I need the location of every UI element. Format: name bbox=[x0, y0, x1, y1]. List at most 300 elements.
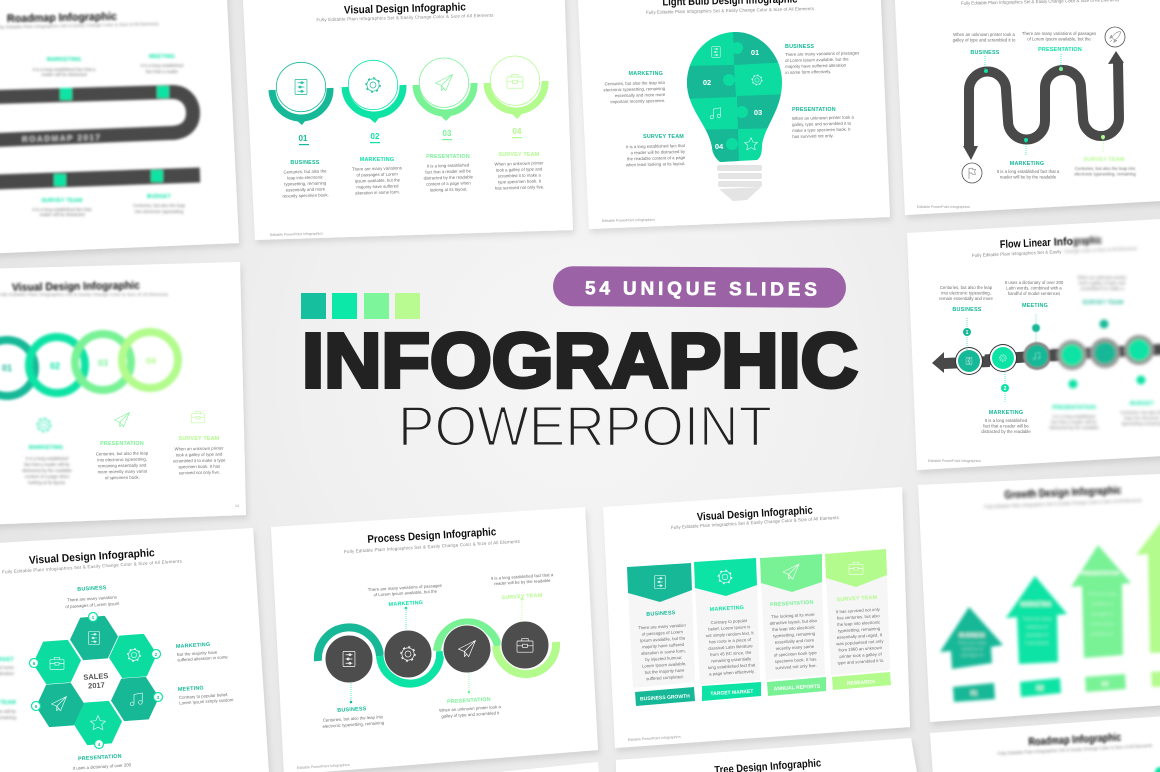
badge numbers: 5 bbox=[35, 704, 38, 709]
number badges bbox=[30, 612, 162, 748]
arrow body text: variations of bbox=[1091, 601, 1114, 606]
column 4 text: type specimen book. It bbox=[498, 178, 542, 185]
flow left sharp: MEETING bbox=[1022, 303, 1048, 309]
label business: When an unknown printer took a bbox=[953, 32, 1016, 37]
slide: roadmap top left bbox=[0, 0, 239, 254]
connector dots bbox=[350, 598, 523, 703]
bulb: 03 bbox=[754, 108, 762, 117]
title: Visual Design Infographic bbox=[697, 505, 813, 523]
flow left sharp: Editable PowerPoint Infographics bbox=[928, 459, 981, 463]
card 2 text: belief, Lorem Ipsum is bbox=[708, 624, 750, 632]
card 4 text bbox=[834, 595, 886, 666]
label meeting: Lorem Ipsum simply random bbox=[179, 697, 234, 705]
column 1 text: leap into electronic bbox=[287, 175, 324, 180]
tag numbers: 02 bbox=[1037, 686, 1044, 692]
label business bbox=[953, 32, 1016, 56]
column 1 text: essentially and more bbox=[286, 186, 326, 193]
column 2 text: majority have suffered bbox=[356, 183, 399, 190]
arrow body text: Lorem Ipsum bbox=[1090, 621, 1114, 626]
badge numbers: 4 bbox=[98, 742, 101, 747]
label business: There are many variations of passages bbox=[785, 50, 859, 57]
circle 4 bbox=[487, 56, 545, 119]
headline: INFOGRAPHIC bbox=[302, 318, 858, 404]
subtitle: Fully Editable Plain Infographics Set & Easily Change Color & Size of All Elements bbox=[997, 743, 1153, 756]
card buttons bbox=[635, 672, 891, 706]
column 4 text: 04 bbox=[513, 127, 522, 136]
arrow 2 bbox=[1006, 576, 1067, 664]
flow left sharp: into electronic typesetting, bbox=[941, 290, 991, 296]
roadmap content blurred: SURVEY TEAM bbox=[42, 198, 83, 204]
flow left sharp: BUSINESS bbox=[952, 307, 982, 313]
card 3 text: of specimen book type bbox=[774, 650, 817, 658]
arrow body text: passages of bbox=[1026, 632, 1049, 637]
label meeting: MEETING bbox=[178, 685, 204, 693]
hexagon icons bbox=[50, 631, 142, 730]
label presentation: PRESENTATION bbox=[447, 697, 491, 705]
slide: roadmap bottom right bbox=[930, 715, 1160, 772]
card 1 text: There are many variation bbox=[638, 623, 687, 630]
label marketing: of Lorem Ipsum available, but the bbox=[373, 589, 438, 597]
label marketing: electronic typesetting, remaining bbox=[603, 86, 666, 92]
rings right text: PRESENTATION bbox=[100, 441, 144, 447]
flow left sharp: MARKETING bbox=[989, 410, 1023, 416]
rings right text bbox=[96, 412, 239, 508]
flow right blurred: SURVEY TEAM bbox=[1083, 300, 1124, 306]
arrow 4 bbox=[1136, 513, 1160, 653]
bottom tags bbox=[953, 671, 1160, 702]
label meeting bbox=[178, 685, 234, 705]
roadmap content blurred: MARKETING bbox=[47, 57, 81, 63]
column 2 text bbox=[352, 132, 403, 196]
rings blurred part: distracted by the readable bbox=[22, 468, 72, 473]
footer: Editable PowerPoint Infographics bbox=[270, 232, 323, 237]
flow right blurred: distracted by the readable bbox=[1049, 425, 1099, 430]
label business bbox=[322, 706, 385, 729]
label marketing: important recently specimen. bbox=[610, 98, 665, 104]
roadmap content blurred: reader will be distracted bbox=[39, 212, 85, 217]
card 1 text: majority have suffered bbox=[642, 642, 685, 649]
card 3 text: the leap into electronic bbox=[772, 624, 816, 632]
slide: flow linear bbox=[907, 218, 1160, 470]
slide: hexagon sales bbox=[0, 528, 270, 772]
label business bbox=[785, 44, 860, 75]
card 1 text: Ipsum available, but the bbox=[640, 635, 686, 643]
slide: light bulb bbox=[577, 0, 890, 229]
button labels: RESEARCH bbox=[847, 679, 876, 687]
label presentation: PRESENTATION bbox=[792, 107, 836, 113]
card 4 text: It has survived not only bbox=[836, 607, 881, 614]
arrow body text: passages of bbox=[961, 652, 984, 657]
flow right blurred: leap into electronic bbox=[1124, 416, 1160, 420]
label marketing bbox=[603, 71, 666, 104]
arrow labels: BUSINESS bbox=[959, 633, 985, 639]
subtitle: Fully Editable Plain Infographics Set & Easily Change Color & Size of All Elements bbox=[344, 539, 521, 554]
flow right blurred: BUDGET bbox=[1130, 401, 1154, 407]
column 1 text: BUSINESS bbox=[290, 160, 320, 166]
label business: There are many variations bbox=[67, 594, 117, 603]
rings blurred part: Visual Design Infographic bbox=[12, 280, 140, 294]
teal marker bbox=[1155, 767, 1160, 772]
label survey team: Centuries, but also the leap into bbox=[1075, 166, 1136, 171]
flow right blurred: scrambled it to make a bbox=[1080, 286, 1124, 291]
circle 1 bbox=[272, 62, 330, 125]
label survey team: the readable content of a page bbox=[627, 155, 686, 161]
dark circles bbox=[325, 621, 549, 683]
flow left sharp: handful of model sentences bbox=[1008, 291, 1060, 296]
label business: BUSINESS bbox=[77, 585, 107, 593]
rings right text: Centuries, but also the leap bbox=[96, 451, 149, 456]
rings right text: 14 bbox=[235, 504, 239, 508]
label marketing: There are many variations of passages bbox=[368, 583, 442, 592]
label marketing: Centuries, but also the leap into bbox=[604, 80, 666, 86]
label marketing bbox=[176, 642, 228, 662]
subheadline: POWERPOINT bbox=[398, 394, 772, 458]
roadmap content blurred: It is a long established fact that bbox=[32, 207, 92, 212]
rings blurred part: 04 bbox=[146, 356, 156, 366]
flow right blurred: Change Color & Size of All Elements bbox=[1064, 246, 1138, 254]
slide: tree design bbox=[616, 738, 920, 772]
left labels blurred bbox=[0, 657, 17, 720]
process icons bbox=[343, 639, 533, 667]
rings blurred part: fact that a reader will be bbox=[24, 462, 70, 467]
card 3 text: The looking at its more bbox=[771, 612, 815, 619]
badge numbers: 6 bbox=[33, 661, 36, 666]
label survey team: SURVEY TEAM bbox=[1084, 157, 1125, 163]
label business: of Lorem Ipsum available, but the bbox=[785, 57, 849, 63]
subtitle: Fully Editable Plain Infographics Set & Easily Change Color & Size of All Elements bbox=[671, 515, 840, 530]
label marketing: It is a long established fact that a bbox=[997, 169, 1060, 174]
card 2 text: long established fact that bbox=[708, 662, 756, 670]
card 3 text: attractive layout, but also bbox=[769, 618, 818, 626]
label business: BUSINESS bbox=[337, 706, 367, 714]
flow left sharp: fact that a reader will be bbox=[983, 424, 1029, 428]
flow left sharp: 2 bbox=[1004, 386, 1007, 392]
roadmap content blurred: It is a long established bbox=[141, 63, 184, 68]
column 4 text bbox=[494, 127, 545, 191]
card 4 text: the leap into electronic bbox=[837, 619, 881, 627]
card 4 text: typesetting, remaining bbox=[838, 626, 881, 633]
label presentation: galley, type and scrambled it to bbox=[792, 121, 852, 127]
column 2 text: Ipsum available, but the bbox=[355, 177, 401, 184]
flow right blurred: fact that a reader will be bbox=[1051, 420, 1097, 424]
flow right blurred: took a galley of type and bbox=[1079, 280, 1126, 286]
column 1 text: Centuries, but also the bbox=[283, 168, 327, 175]
badge: 54 unique slides bbox=[553, 266, 846, 308]
card 2 text: a page when effectively. bbox=[709, 669, 755, 676]
road bbox=[969, 62, 1119, 147]
label business: BUSINESS bbox=[970, 50, 1000, 56]
column 2 text: MARKETING bbox=[360, 157, 394, 163]
rings right text: When an unknown printer bbox=[174, 446, 224, 451]
label business: electronic typesetting, remaining bbox=[322, 720, 385, 729]
title: Growth Design Infographic bbox=[1004, 485, 1122, 501]
badge: 54 unique slides: 54 UNIQUE SLIDES bbox=[585, 278, 817, 301]
footer: Editable PowerPoint Infographics bbox=[917, 205, 970, 209]
slide: process design bbox=[271, 507, 598, 772]
button labels bbox=[640, 679, 876, 702]
column 2 text: 02 bbox=[371, 132, 380, 141]
column 4 text: scrambled it to make a bbox=[498, 172, 542, 179]
card 1 text: but the majority have bbox=[645, 668, 685, 675]
column 1 text: 01 bbox=[299, 134, 308, 143]
flow left sharp: Flow Linear bbox=[1000, 237, 1052, 251]
rings right text: survived not only five. bbox=[179, 470, 220, 475]
label survey team: SURVEY TEAM bbox=[643, 134, 684, 140]
arrow heads bbox=[963, 51, 1124, 160]
column 2 text: alteration in some form. bbox=[355, 189, 400, 196]
card 3 text: recently many same bbox=[775, 644, 815, 651]
column 2 text: of passages of Lorem bbox=[356, 171, 398, 178]
subtitle: Fully Editable Plain Infographics Set & Easily Change Color & Size of All Elements bbox=[646, 6, 815, 15]
column 1 text: typesetting, remaining bbox=[284, 180, 327, 187]
rings blurred part: It is a long established bbox=[26, 456, 69, 461]
flow right blurred: When an unknown printer bbox=[1078, 275, 1127, 280]
column 3 text bbox=[423, 129, 474, 193]
rings blurred part: 03 bbox=[98, 358, 108, 368]
flow middle blur: Info bbox=[1054, 236, 1073, 249]
flow left sharp: Latin words, combined with a bbox=[1006, 286, 1062, 290]
connectors bbox=[351, 599, 522, 702]
label presentation: When an unknown printer took a bbox=[439, 704, 502, 713]
center label: SALES bbox=[83, 671, 109, 682]
slide: growth design bbox=[918, 473, 1160, 722]
label business: of passages of Lorem Ipsum bbox=[65, 601, 120, 609]
roadmap content blurred: reader will be distracted bbox=[41, 72, 87, 77]
card 2 text: MARKETING bbox=[710, 605, 744, 613]
card 1 text: by injected humour. bbox=[645, 655, 683, 662]
rings blurred part: Fully Editable Plain Infographics Set & Easily Change Color & Size of All Elements bbox=[0, 292, 169, 297]
card 3 text: typesetting, remaining bbox=[773, 631, 816, 638]
card 4 text: printer took a galley of bbox=[839, 651, 883, 659]
card 1 text: BUSINESS bbox=[646, 610, 676, 618]
roadmap content blurred bbox=[0, 11, 200, 217]
arrow body text: There are many bbox=[1023, 616, 1051, 621]
bulb: 04 bbox=[715, 142, 724, 151]
label business: Centuries, but also the leap into bbox=[323, 714, 384, 723]
label marketing: MARKETING bbox=[1010, 161, 1044, 167]
column 4 text: has survived not only five. bbox=[495, 184, 544, 191]
label survey team: SURVEY TEAM bbox=[501, 593, 543, 601]
column 3 text: content of a page when bbox=[426, 180, 471, 187]
footer: Editable PowerPoint Infographics bbox=[602, 218, 655, 223]
label survey team: a reader will be distracted by bbox=[630, 149, 686, 155]
label presentation: has survived not only. bbox=[792, 133, 834, 139]
label business: in some form effectively. bbox=[785, 69, 831, 75]
label meeting: Contrary to popular belief, bbox=[179, 692, 228, 700]
label survey team bbox=[491, 572, 554, 601]
label presentation bbox=[73, 754, 132, 771]
card 2 text: has roots in a piece of bbox=[709, 637, 752, 644]
label business: BUSINESS bbox=[785, 44, 814, 50]
card 2 text bbox=[705, 605, 757, 677]
arrow body text: variations of bbox=[1026, 624, 1049, 629]
bulb: 02 bbox=[703, 78, 711, 87]
arrow labels bbox=[959, 571, 1120, 639]
flow left sharp: remain essentially and more bbox=[939, 296, 993, 301]
column 3 text: looking at its layout. bbox=[430, 186, 468, 192]
rings blurred part bbox=[0, 280, 178, 485]
subtitle: Fully Editable Plain Infographics Set & Easily Change Color & Size of All Elements bbox=[2, 558, 183, 574]
label survey team: It is a long established fact that a bbox=[491, 572, 554, 581]
arrow body text bbox=[958, 591, 1116, 657]
rings right text: more recently many variat bbox=[98, 469, 148, 474]
label survey team bbox=[625, 134, 686, 167]
column 4 text: took a galley of type and bbox=[496, 166, 543, 173]
footer: Editable PowerPoint Infographics bbox=[628, 735, 681, 742]
button labels: ANNUAL REPORTS bbox=[774, 684, 821, 692]
button labels: BUSINESS GROWTH bbox=[640, 694, 690, 702]
card 1 text: suffered completed. bbox=[646, 674, 684, 681]
subtitle: Fully Editable Plain Infographics Set & Easily Change Color & Size of All Elements bbox=[984, 498, 1143, 509]
label presentation bbox=[792, 107, 855, 139]
tag numbers bbox=[971, 682, 1109, 697]
column 4 text: When an unknown printer bbox=[494, 160, 544, 167]
label business: galley of type and scrambled it to bbox=[953, 38, 1016, 42]
bulb base bbox=[717, 165, 762, 201]
arrow body text: passages of bbox=[1091, 611, 1114, 616]
card 1 text: Lorem Ipsum available, bbox=[642, 661, 687, 669]
arrow body text: There are many bbox=[958, 640, 986, 645]
label presentation bbox=[1022, 31, 1096, 53]
label presentation: galley of type and scrambled it bbox=[441, 710, 500, 719]
flow right blurred: It is a long established bbox=[1053, 414, 1096, 419]
arrow body text: variations of bbox=[961, 646, 984, 651]
arrow body text: Lorem Ipsum bbox=[1025, 640, 1049, 645]
icon: rocket bbox=[1105, 27, 1125, 47]
label marketing bbox=[997, 161, 1060, 180]
colour squares bbox=[301, 293, 420, 319]
label survey team: when least looking at its layout. bbox=[626, 161, 685, 167]
card icons bbox=[655, 562, 863, 589]
slide: sliver under process bbox=[440, 762, 600, 772]
column 1 text: recently specimen book. bbox=[282, 192, 329, 199]
bulb bbox=[687, 32, 782, 162]
roadmap content blurred: BUDGET bbox=[147, 194, 171, 200]
label marketing bbox=[368, 583, 442, 608]
icon: flag bbox=[962, 163, 982, 183]
flow left sharp: Centuries, but also the leap bbox=[940, 285, 993, 290]
label marketing: MARKETING bbox=[176, 642, 211, 650]
flow right blurred: PRESENTATION bbox=[1052, 405, 1096, 411]
roadmap content blurred: ROADMAP 2017 bbox=[22, 133, 101, 144]
label marketing: essentially and more more bbox=[615, 92, 666, 98]
badge numbers bbox=[33, 615, 160, 747]
label presentation: of Lorem Ipsum available, but the bbox=[1027, 36, 1091, 42]
card 3 text: survived not only five. bbox=[775, 663, 817, 670]
card 1 text: alteration in some form, bbox=[641, 648, 686, 656]
label marketing: suffered alteration in some bbox=[177, 654, 228, 662]
label marketing: reader will be by the readable bbox=[1000, 174, 1057, 180]
roadmap content blurred: Roadmap Infographic bbox=[7, 11, 117, 25]
slide: visual design cards bbox=[603, 487, 910, 748]
hexagons bbox=[32, 616, 160, 745]
bulb: 01 bbox=[751, 48, 759, 57]
card 2 text: from 45 BC since, the bbox=[710, 650, 752, 657]
label presentation: PRESENTATION bbox=[78, 754, 122, 762]
label presentation bbox=[439, 697, 502, 719]
flow right blurred: graphic bbox=[1073, 235, 1102, 248]
rings right text: took a galley of type and bbox=[176, 452, 223, 457]
card 3 text: specimen book. It has bbox=[775, 656, 817, 664]
flow left sharp bbox=[928, 237, 1064, 463]
arrow body text: available but bbox=[1091, 631, 1114, 636]
flow left sharp: 1 bbox=[966, 330, 969, 336]
rings right text: remaining essentially and bbox=[98, 463, 147, 468]
roadmap content blurred: MEETING bbox=[149, 54, 175, 60]
wave ribbon bbox=[318, 622, 556, 684]
label survey team: It is a long established fact that bbox=[626, 143, 686, 149]
subtitle: Fully Editable Plain Infographics Set & Easily Change Color & Size of All Elements bbox=[316, 13, 494, 22]
label presentation: When an unknown printer took a bbox=[792, 115, 854, 121]
arrow 1 bbox=[940, 607, 1003, 669]
badge numbers: 3 bbox=[157, 695, 160, 700]
rings blurred part: 01 bbox=[2, 363, 12, 373]
title: Process Design Infographic bbox=[367, 526, 497, 546]
label presentation: PRESENTATION bbox=[1038, 47, 1082, 53]
label survey team: electronic typesetting, remaining bbox=[1074, 172, 1136, 176]
card 3 text: essentially and more bbox=[775, 637, 815, 645]
rings blurred part: MARKETING bbox=[29, 445, 63, 451]
flow left sharp: Fully Editable Plain Infographics Set & Easily bbox=[972, 249, 1062, 258]
label business bbox=[65, 585, 120, 609]
flow left sharp: It is a long established bbox=[985, 418, 1028, 423]
label presentation: make a type specimen book. It bbox=[792, 127, 851, 133]
label marketing: MARKETING bbox=[389, 600, 423, 608]
card 4 text: was popularised not only bbox=[836, 638, 884, 646]
roadmap content blurred: into electronic typesetting bbox=[135, 209, 184, 214]
card 4 text: five centuries, but also bbox=[837, 613, 880, 621]
roadmap content blurred: It is a long established fact that a bbox=[33, 67, 96, 72]
card 2 text: not simply random text. It bbox=[706, 630, 755, 638]
card 3 text: PRESENTATION bbox=[770, 600, 814, 608]
column 3 text: It is a long established bbox=[427, 162, 470, 169]
title: Roadmap Infographic bbox=[1028, 732, 1122, 748]
label survey team: reader will be by the readable bbox=[494, 578, 551, 586]
column 2 text: There are many variations bbox=[352, 165, 402, 172]
tag numbers: 03 bbox=[1102, 682, 1109, 688]
flow middle blur bbox=[1023, 236, 1073, 370]
column 3 text: distracted by the readable bbox=[423, 174, 474, 181]
arrow labels: MARKETING bbox=[1021, 602, 1051, 608]
title: Visual Design Infographic bbox=[29, 547, 155, 567]
rings right text: into electronic typesetting, bbox=[97, 457, 147, 462]
card 1 text bbox=[638, 610, 690, 682]
circle 3 bbox=[416, 58, 474, 121]
rings right text: scrambled it to make a type bbox=[173, 458, 226, 463]
column 3 text: fact that a reader will be bbox=[425, 168, 472, 175]
arrow labels: PRESENTATION bbox=[1081, 571, 1120, 577]
badge numbers: 2 bbox=[155, 652, 158, 657]
slide: visual design circles bbox=[242, 0, 573, 240]
title: Visual Design Infographic bbox=[344, 1, 466, 17]
label marketing: MARKETING bbox=[629, 71, 663, 77]
road markers bbox=[984, 53, 1105, 156]
column 4 text: SURVEY TEAM bbox=[499, 152, 540, 158]
slide: winding road bbox=[894, 0, 1160, 215]
card 2 text: Contrary to popular bbox=[710, 618, 748, 625]
rings right text: specimen book. It has bbox=[178, 464, 220, 469]
badge numbers: 1 bbox=[92, 615, 95, 620]
card 1 text: of passages of Lorem bbox=[642, 629, 683, 637]
card 4 text: SURVEY TEAM bbox=[836, 595, 878, 603]
card 4 text: essentially and urged. It bbox=[837, 632, 883, 640]
card bodies bbox=[628, 575, 890, 688]
button labels: TARGET MARKET bbox=[710, 689, 754, 697]
label presentation: There are many variations of passages bbox=[1022, 31, 1096, 36]
flow right blurred bbox=[1049, 235, 1160, 430]
slide: interlocking rings bbox=[0, 262, 246, 525]
card 3 text bbox=[769, 600, 820, 671]
